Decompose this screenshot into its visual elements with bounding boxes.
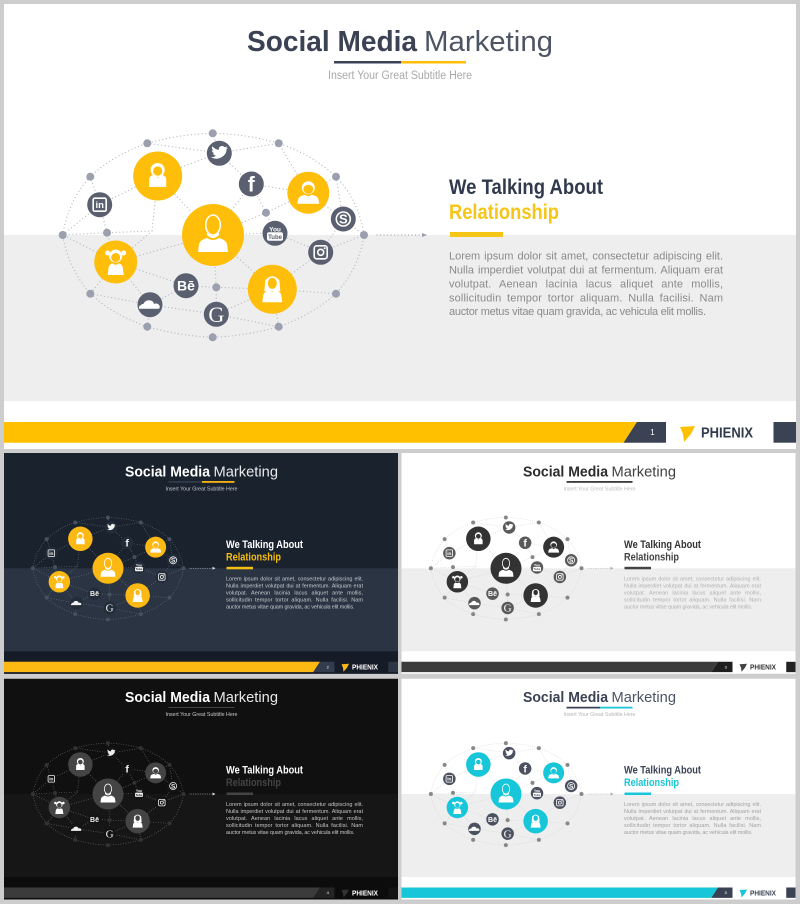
icon: behance: Bē (90, 591, 99, 598)
icon: soundcloud (468, 823, 481, 835)
icon: soundcloud (138, 292, 162, 317)
title underline (566, 707, 632, 708)
icon: linkedin (443, 773, 456, 785)
subtitle: Insert Your Great Subtitle Here (328, 70, 472, 82)
icon: instagram (554, 796, 566, 809)
icon: google: G (208, 302, 224, 327)
network diagram (59, 129, 368, 341)
heading: We Talking About (226, 539, 303, 551)
icon: soundcloud (70, 597, 83, 609)
icon: youtube: You (534, 789, 540, 793)
grey band (4, 235, 796, 401)
footer bar (4, 422, 666, 443)
icon: twitter (105, 747, 117, 759)
icon: instagram (554, 571, 566, 583)
icon: facebook: f (125, 538, 129, 550)
footer corner block (388, 662, 400, 672)
icon: linkedin: in (49, 551, 54, 557)
icon: google: G (504, 828, 512, 840)
icon: skype: S (171, 783, 176, 790)
icon: youtube: Tube (534, 793, 541, 797)
title: Social Media (125, 690, 211, 706)
band (4, 794, 400, 877)
body text: sollicitudin tempor tortor aliquam. Nulla facilisi. Nam (449, 292, 723, 304)
footer corner block (786, 888, 798, 898)
logo: PHIENIX (352, 888, 378, 897)
footer bar: 1 (650, 428, 655, 437)
panel: greyscale slide (402, 453, 798, 675)
body text: auctor metus vitae quam gravida, ac vehicula elit mollis. (449, 306, 706, 318)
icon: behance (88, 587, 101, 600)
heading (624, 539, 701, 563)
footer background (4, 674, 398, 675)
person: right (145, 762, 166, 783)
icon: soundcloud (468, 597, 481, 609)
person: top left (68, 752, 93, 777)
heading (226, 539, 303, 563)
title (248, 30, 552, 57)
person: top left (133, 152, 182, 200)
icon: skype (565, 780, 577, 792)
logo (342, 663, 378, 672)
footer corner block (786, 662, 798, 672)
icon: linkedin: in (95, 200, 104, 211)
footer bar (402, 662, 732, 672)
icon: skype: S (339, 212, 348, 226)
title (523, 464, 676, 480)
heading (449, 175, 603, 224)
person: center (490, 553, 522, 584)
person: center (182, 204, 244, 266)
icon: linkedin (87, 192, 112, 217)
title underline (168, 481, 234, 483)
icon: facebook (121, 762, 133, 775)
logo (680, 424, 753, 442)
title (523, 690, 676, 706)
icon: behance: Bē (90, 817, 99, 824)
footer bar: 2 (327, 664, 330, 669)
person: left (447, 571, 468, 593)
person: bottom (125, 809, 150, 833)
icon: youtube: You (136, 789, 142, 793)
icon: youtube (133, 787, 145, 799)
body text: volutpat. Aenean lacinia lacus aliquet ante mollis, (624, 590, 761, 596)
icon: skype (167, 780, 179, 792)
icon: twitter (503, 747, 515, 759)
person: center (92, 553, 124, 584)
icon: linkedin (443, 547, 456, 559)
footer bar (4, 888, 334, 898)
icon: google (103, 827, 116, 840)
person: left (94, 240, 137, 284)
connection nodes (31, 515, 185, 621)
heading (624, 764, 701, 789)
title: Social Media (523, 464, 609, 480)
heading: Relationship (624, 551, 679, 563)
icon: google (501, 827, 514, 840)
logo: PHIENIX (701, 424, 753, 442)
person: top left (466, 527, 491, 551)
icon: youtube (133, 561, 145, 574)
body text: sollicitudin tempor tortor aliquam. Nulla facilisi. Nam (624, 823, 761, 829)
person: bottom (523, 809, 548, 833)
body text: volutpat. Aenean lacinia lacus aliquet ante mollis, (624, 816, 761, 822)
person: center (92, 778, 124, 810)
footer bar (402, 888, 732, 898)
body text: Lorem ipsum dolor sit amet, consectetur adipiscing elit. (226, 802, 363, 808)
logo: PHIENIX (750, 663, 776, 672)
person: top left (68, 527, 93, 551)
icon: behance (486, 587, 499, 600)
icon: linkedin (45, 773, 58, 785)
heading: We Talking About (624, 539, 701, 551)
icon: youtube: You (269, 226, 281, 233)
heading rule (450, 232, 503, 237)
person: bottom (248, 265, 297, 314)
heading rule (624, 792, 651, 795)
icon: skype (331, 206, 356, 232)
icon: google: G (106, 828, 114, 840)
arrow (588, 567, 614, 570)
body text (624, 576, 761, 610)
person: bottom (125, 583, 150, 608)
title: Social Media (125, 464, 211, 480)
subtitle: Insert Your Great Subtitle Here (564, 486, 636, 492)
icon: youtube: You (136, 563, 142, 567)
subtitle: Insert Your Great Subtitle Here (564, 712, 636, 718)
heading rule (226, 567, 253, 569)
panel: black slide (4, 678, 400, 901)
title underline (334, 61, 466, 64)
network diagram (429, 741, 584, 847)
heading: We Talking About (624, 764, 701, 776)
connection nodes (31, 741, 185, 847)
person: left (447, 797, 468, 818)
panel: navy slide (4, 453, 400, 675)
heading: Relationship (226, 551, 281, 563)
icon: twitter (503, 521, 515, 534)
icon: youtube: Tube (136, 567, 143, 571)
heading: Relationship (624, 777, 679, 789)
body text: volutpat. Aenean lacinia lacus aliquet ante mollis, (226, 816, 363, 822)
body text: sollicitudin tempor tortor aliquam. Nulla facilisi. Nam (226, 823, 363, 829)
body text: Nulla imperdiet volutpat dui at fermentum. Aliquam erat (449, 264, 723, 276)
body text: Nulla imperdiet volutpat dui at fermentum. Aliquam erat (624, 583, 761, 589)
footer bar (4, 662, 334, 672)
logo: PHIENIX (750, 888, 776, 897)
body text: Lorem ipsum dolor sit amet, consectetur adipiscing elit. (624, 576, 761, 582)
panel: main yellow slide (4, 4, 796, 449)
arrow (190, 567, 216, 570)
heading: We Talking About (449, 175, 603, 199)
heading (226, 764, 303, 789)
icon: facebook: f (248, 174, 256, 196)
body text (449, 250, 723, 318)
icon: facebook (519, 537, 531, 550)
body text: volutpat. Aenean lacinia lacus aliquet ante mollis, (449, 278, 723, 290)
body text (226, 802, 363, 836)
band (402, 794, 798, 877)
title: Marketing (612, 690, 676, 706)
title: Marketing (214, 464, 278, 480)
title (125, 466, 278, 480)
icon: youtube (262, 221, 288, 246)
footer bar: 5 (725, 890, 728, 895)
body text: volutpat. Aenean lacinia lacus aliquet ante mollis, (226, 590, 363, 596)
title underline (168, 707, 234, 708)
title: Social Media (247, 26, 418, 58)
connection nodes (429, 741, 584, 847)
icon: linkedin: in (447, 777, 452, 783)
body text: sollicitudin tempor tortor aliquam. Nulla facilisi. Nam (624, 597, 761, 603)
person: left (49, 571, 70, 593)
body text: Lorem ipsum dolor sit amet, consectetur adipiscing elit. (624, 802, 761, 808)
subtitle: Insert Your Great Subtitle Here (166, 712, 238, 718)
connection nodes (59, 129, 368, 341)
icon: skype (167, 554, 179, 567)
footer bar: 4 (327, 890, 330, 895)
icon: skype: S (569, 783, 574, 790)
title (125, 690, 278, 706)
icon: soundcloud (70, 823, 83, 835)
icon: facebook: f (523, 763, 527, 775)
icon: instagram (308, 240, 333, 265)
icon: behance (88, 813, 101, 826)
icon: google: G (504, 603, 512, 615)
icon: skype: S (569, 558, 574, 565)
title: Marketing (214, 690, 278, 706)
icon: twitter (105, 521, 117, 534)
icon: youtube: Tube (136, 793, 143, 797)
icon: skype: S (171, 558, 176, 565)
body text: sollicitudin tempor tortor aliquam. Nulla facilisi. Nam (226, 597, 363, 603)
icon: youtube: Tube (268, 235, 283, 241)
heading: Relationship (449, 200, 559, 224)
icon: youtube: You (534, 563, 540, 567)
icon: behance (174, 273, 198, 298)
icon: youtube: Tube (534, 567, 541, 571)
person: right (145, 537, 166, 558)
band (4, 568, 400, 651)
arrow (190, 792, 216, 796)
logo (740, 888, 776, 898)
icon: google (204, 302, 229, 327)
person: right (543, 762, 564, 783)
heading rule (226, 792, 253, 795)
icon: facebook (121, 537, 133, 550)
icon: skype (565, 554, 577, 567)
network diagram (31, 741, 185, 847)
icon: behance: Bē (488, 817, 497, 824)
body text: Lorem ipsum dolor sit amet, consectetur adipiscing elit. (226, 576, 363, 582)
icon: google (501, 602, 514, 615)
icon: youtube (531, 787, 543, 799)
band (402, 568, 798, 651)
body text: auctor metus vitae quam gravida, ac vehicula elit mollis. (624, 830, 753, 836)
footer corner block (774, 422, 796, 443)
logo (342, 888, 378, 898)
person: bottom (523, 583, 548, 608)
person: right (287, 172, 329, 214)
person: left (49, 797, 70, 818)
network diagram (31, 515, 185, 621)
icon: linkedin (45, 547, 58, 559)
subtitle: Insert Your Great Subtitle Here (166, 486, 238, 492)
heading: Relationship (226, 777, 281, 789)
body text: Lorem ipsum dolor sit amet, consectetur adipiscing elit. (449, 250, 723, 262)
person: center (490, 778, 522, 810)
icon: twitter (207, 141, 232, 166)
icon: linkedin: in (447, 551, 452, 557)
title: Marketing (612, 464, 676, 480)
icon: youtube (531, 561, 543, 574)
network diagram (429, 515, 584, 621)
footer bar: 3 (725, 664, 728, 669)
icon: behance (486, 813, 499, 826)
body text: auctor metus vitae quam gravida, ac vehicula elit mollis. (226, 830, 355, 836)
footer corner block (388, 888, 400, 898)
logo (740, 663, 776, 672)
connection nodes (429, 515, 584, 621)
icon: google: G (106, 603, 114, 615)
icon: google (103, 602, 116, 615)
icon: facebook (239, 172, 264, 196)
arrow (377, 233, 427, 237)
footer background (4, 877, 400, 901)
icon: facebook (519, 762, 531, 775)
body text (226, 576, 363, 610)
body text: Nulla imperdiet volutpat dui at fermentum. Aliquam erat (624, 809, 761, 815)
icon: instagram (156, 796, 168, 809)
title: Social Media (523, 690, 609, 706)
title underline (566, 481, 632, 483)
heading rule (624, 567, 651, 569)
icon: instagram (156, 571, 168, 583)
icon: behance: Bē (177, 278, 195, 294)
person: top left (466, 752, 491, 777)
heading: We Talking About (226, 764, 303, 776)
body text: auctor metus vitae quam gravida, ac vehicula elit mollis. (624, 604, 753, 610)
title: Marketing (424, 26, 553, 58)
icon: facebook: f (125, 763, 129, 775)
body text (624, 802, 761, 836)
body text: auctor metus vitae quam gravida, ac vehicula elit mollis. (226, 604, 355, 610)
icon: behance: Bē (488, 591, 497, 598)
panel: cyan slide (402, 678, 798, 901)
arrow (588, 792, 614, 796)
logo: PHIENIX (352, 663, 378, 672)
person: right (543, 537, 564, 558)
icon: linkedin: in (49, 777, 54, 783)
body text: Nulla imperdiet volutpat dui at fermentum. Aliquam erat (226, 809, 363, 815)
icon: facebook: f (523, 538, 527, 550)
body text: Nulla imperdiet volutpat dui at fermentum. Aliquam erat (226, 583, 363, 589)
